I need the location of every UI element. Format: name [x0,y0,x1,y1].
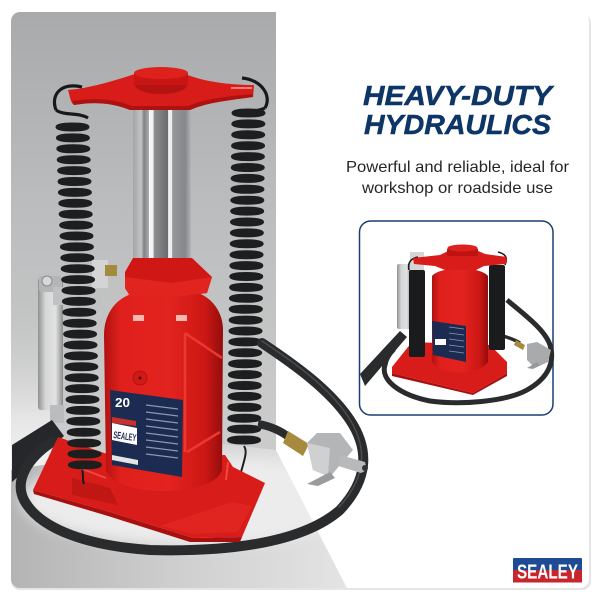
jack cylinder [104,293,223,491]
brass fitting [283,431,309,456]
top saddle plate [68,67,254,110]
inset left spring [409,257,425,357]
inset handle [360,331,407,386]
description text: workshop or roadside use [361,180,553,197]
heading: HEAVY-DUTY [363,80,555,111]
warning label: SEALEY [113,430,137,444]
hose: main coil [21,341,363,550]
inset air cylinder [397,252,424,329]
air inlet handle [12,420,64,482]
heading [363,80,555,140]
piston [133,108,191,274]
description text [346,159,570,197]
heading: HYDRAULICS [364,109,552,140]
warning label [110,390,183,477]
warning label: 20 [115,395,130,410]
small air hose [258,424,290,438]
logo: SEALEY: SEALEY [517,562,578,584]
inset jack body [432,268,488,372]
inset right spring [489,252,506,350]
valve block [307,433,353,477]
jack base plate [33,437,265,542]
inset label [432,321,466,362]
body reinforcement ribs [185,333,222,452]
spring: left [54,86,99,484]
air cylinder [38,260,117,423]
valve trigger [307,472,335,486]
inset hose [384,300,552,403]
logo: SEALEY [513,558,582,584]
valve nozzle [338,455,367,473]
spring: right [230,78,267,476]
inset jack base [392,342,507,393]
air hose with valve [258,424,368,486]
description text: Powerful and reliable, ideal for [346,159,570,176]
panel: inset product photo [360,221,553,415]
jack collar [125,258,212,297]
jack body [33,258,265,542]
inset saddle plate [413,244,507,270]
panel: product photo backdrop [11,12,358,588]
inset small hose and valve [503,336,551,369]
